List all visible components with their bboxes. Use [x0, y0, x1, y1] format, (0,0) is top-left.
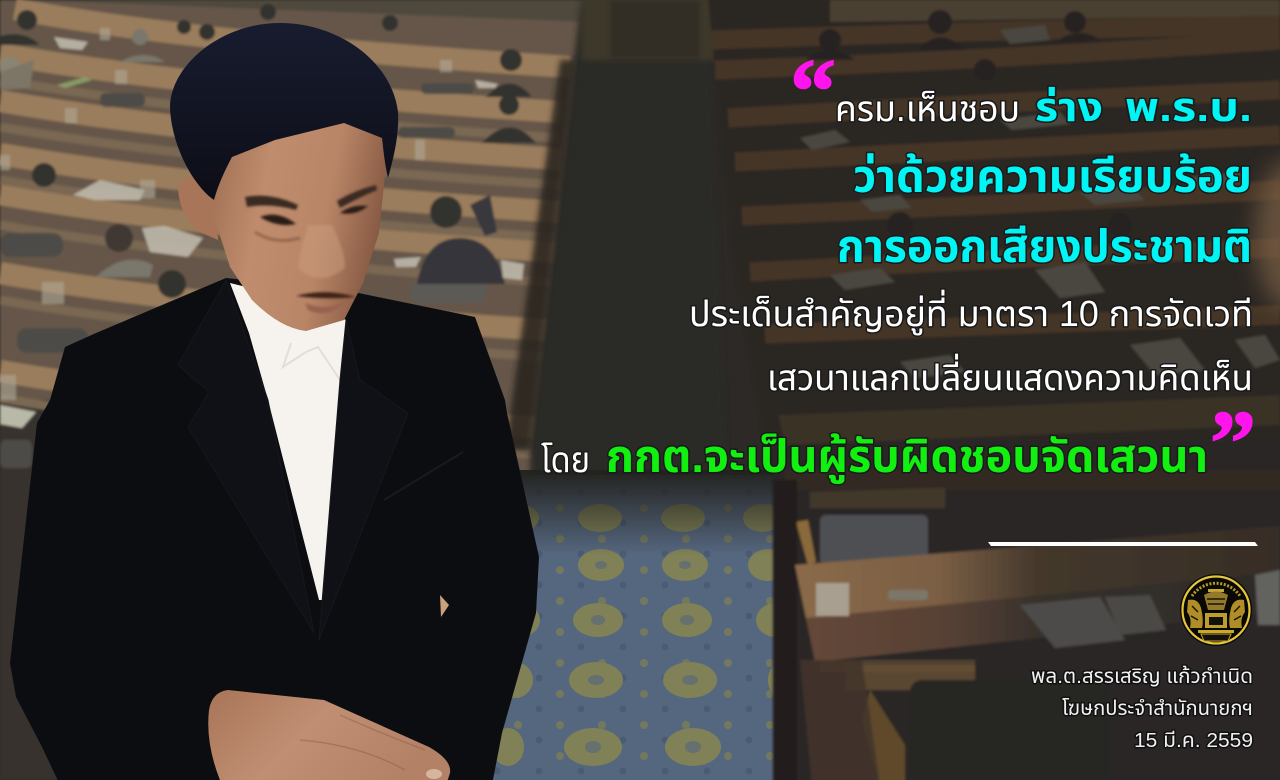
breast pocket [384, 452, 463, 500]
white shirt [230, 283, 346, 600]
spokesperson credit [1031, 664, 1253, 752]
lower right desks [773, 395, 1280, 780]
quote line 1 [835, 85, 1252, 130]
portrait: man in black suit [10, 23, 539, 780]
ear [178, 176, 218, 240]
chairs [0, 83, 486, 468]
suit jacket [10, 278, 539, 780]
hand [208, 690, 450, 780]
quote line 2: ว่าด้วยความเรียบร้อย [853, 151, 1252, 202]
icon: government seal [1180, 574, 1252, 646]
quote line 1: ร่าง [1035, 85, 1103, 130]
closing quote mark: ” [1210, 392, 1256, 494]
sleeve gap [440, 595, 449, 617]
credit date: 15 มี.ค. 2559 [1134, 729, 1253, 752]
top strip behind first row [0, 0, 590, 22]
quote line 5: เสวนาแลกเปลี่ยนแสดงความคิดเห็น [767, 353, 1253, 398]
face [214, 100, 394, 331]
quote line 4: ประเด็นสำคัญอยู่ที่ มาตรา 10 การจัดเวที [689, 289, 1253, 335]
central aisle stairs [530, 0, 830, 500]
quote line 6: กกต.จะเป็นผู้รับผิดชอบจัดเสวนา [606, 431, 1208, 484]
papers [0, 37, 524, 428]
left seating rows [0, 0, 590, 780]
right seating rows (dimmed) [708, 0, 1280, 480]
divider line [988, 542, 1258, 546]
hair [170, 23, 398, 200]
quote line 1: ครม.เห็นชอบ [835, 88, 1020, 129]
credit name: พล.ต.สรรเสริญ แก้วกำเนิด [1031, 664, 1253, 688]
carpet with medallions [480, 470, 800, 780]
right edge highlight [1255, 160, 1280, 310]
facial features [245, 185, 377, 313]
quote line 3: การออกเสียงประชามติ [837, 221, 1252, 272]
quote line 1: พ.ร.บ. [1125, 86, 1252, 130]
right lapel [319, 320, 408, 640]
desk placards [0, 28, 452, 400]
opening quote mark: “ [790, 40, 836, 142]
quote text block [541, 85, 1253, 484]
quote line 6: โดย [541, 439, 590, 480]
credit role: โฆษกประจำสำนักนายกฯ [1062, 697, 1253, 720]
left lapel [178, 280, 314, 633]
members [0, 4, 536, 298]
